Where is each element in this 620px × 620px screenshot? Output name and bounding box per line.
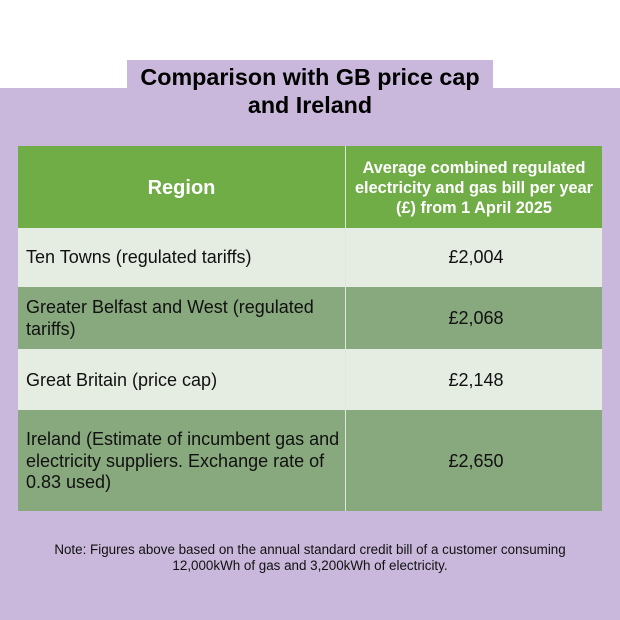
row: Greater Belfast label bbox=[18, 287, 345, 349]
title bbox=[140, 64, 480, 118]
row: Ten Towns value bbox=[346, 228, 602, 287]
row: Great Britain value: £2,148 bbox=[448, 370, 504, 390]
row: Greater Belfast label: tariffs) bbox=[26, 318, 76, 338]
row: Greater Belfast value: £2,068 bbox=[448, 308, 504, 328]
header cell: average bill: electricity and gas bill per year bbox=[355, 179, 593, 197]
header cell: region bbox=[18, 146, 345, 228]
header cell: average bill bbox=[346, 146, 602, 228]
title tab bbox=[127, 60, 493, 88]
header cell: average bill: Average combined regulated bbox=[363, 159, 585, 177]
row: Ireland label: Ireland (Estimate of incumbent gas and bbox=[26, 429, 339, 449]
row: Ireland label: 0.83 used) bbox=[26, 472, 111, 492]
row: Ireland label: electricity suppliers. Exchange rate of bbox=[26, 450, 324, 470]
row: Ireland value bbox=[346, 410, 602, 511]
row: Great Britain label bbox=[18, 349, 345, 410]
row: Ten Towns value: £2,004 bbox=[448, 247, 504, 267]
footnote: Note: Figures above based on the annual standard credit bill of a customer consuming bbox=[54, 542, 566, 557]
header cell: average bill: (£) from 1 April 2025 bbox=[396, 199, 552, 217]
row: Ireland label bbox=[18, 410, 345, 511]
row: Ten Towns label: Ten Towns (regulated tariffs) bbox=[26, 247, 251, 267]
footnote: 12,000kWh of gas and 3,200kWh of electricity. bbox=[172, 558, 448, 573]
row: Ten Towns label bbox=[18, 228, 345, 287]
comparison table bbox=[18, 146, 602, 511]
footnote bbox=[54, 542, 566, 573]
title: Comparison with GB price cap bbox=[140, 64, 480, 90]
row: Great Britain label: Great Britain (price cap) bbox=[26, 370, 217, 390]
row: Greater Belfast value bbox=[346, 287, 602, 349]
header cell: region: Region bbox=[148, 177, 215, 199]
row: Ireland value: £2,650 bbox=[448, 451, 504, 471]
row: Greater Belfast label: Greater Belfast and West (regulated bbox=[26, 297, 314, 317]
row: Great Britain value bbox=[346, 349, 602, 410]
title: and Ireland bbox=[248, 92, 372, 118]
